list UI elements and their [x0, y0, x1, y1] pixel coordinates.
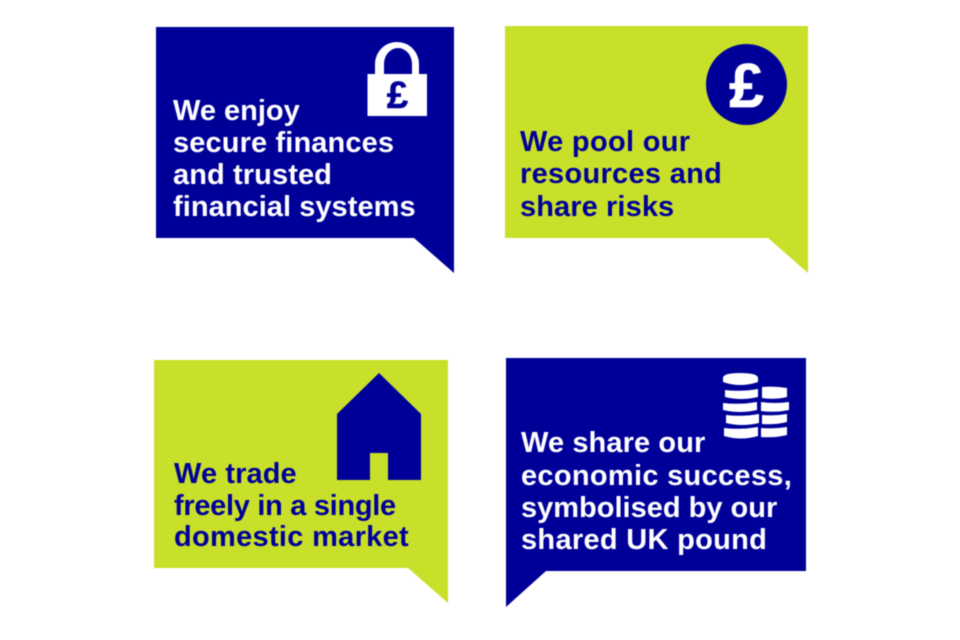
icon: padlock with pound sign: [368, 42, 427, 117]
text: single market: freely in a single: [174, 490, 396, 522]
speech bubble: pool resources: [505, 26, 808, 273]
text: secure finances: financial systems: [173, 191, 416, 223]
speech bubble: secure finances: [156, 27, 454, 273]
text: shared success: shared UK pound: [521, 524, 767, 556]
panel: shared success: [506, 358, 806, 607]
text: pool resources: share risks: [520, 191, 674, 223]
icon: pound coin: £: [729, 52, 764, 121]
icon: pound coin: [706, 44, 787, 125]
text: pool resources: We pool our: [520, 126, 690, 158]
panel: single market: [154, 360, 448, 603]
text: secure finances: We enjoy: [173, 95, 300, 127]
text: shared success: We share our: [521, 427, 705, 459]
speech bubble: single market: [154, 360, 448, 603]
text: single market: We trade: [174, 458, 297, 490]
text: secure finances: and trusted: [173, 159, 332, 191]
text: pool resources: resources and: [520, 158, 722, 190]
text: shared success: economic success,: [521, 460, 792, 492]
icon: padlock with pound sign: £: [387, 75, 408, 117]
panel: pool resources: [505, 26, 808, 273]
speech bubble: shared success: [506, 358, 806, 607]
icon: house: [337, 373, 421, 480]
text: single market: domestic market: [174, 521, 409, 553]
icon: stack of coins: [723, 373, 789, 438]
text: shared success: symbolised by our: [521, 492, 777, 524]
text: secure finances: secure finances: [173, 127, 394, 159]
panel: secure finances: [156, 27, 454, 273]
